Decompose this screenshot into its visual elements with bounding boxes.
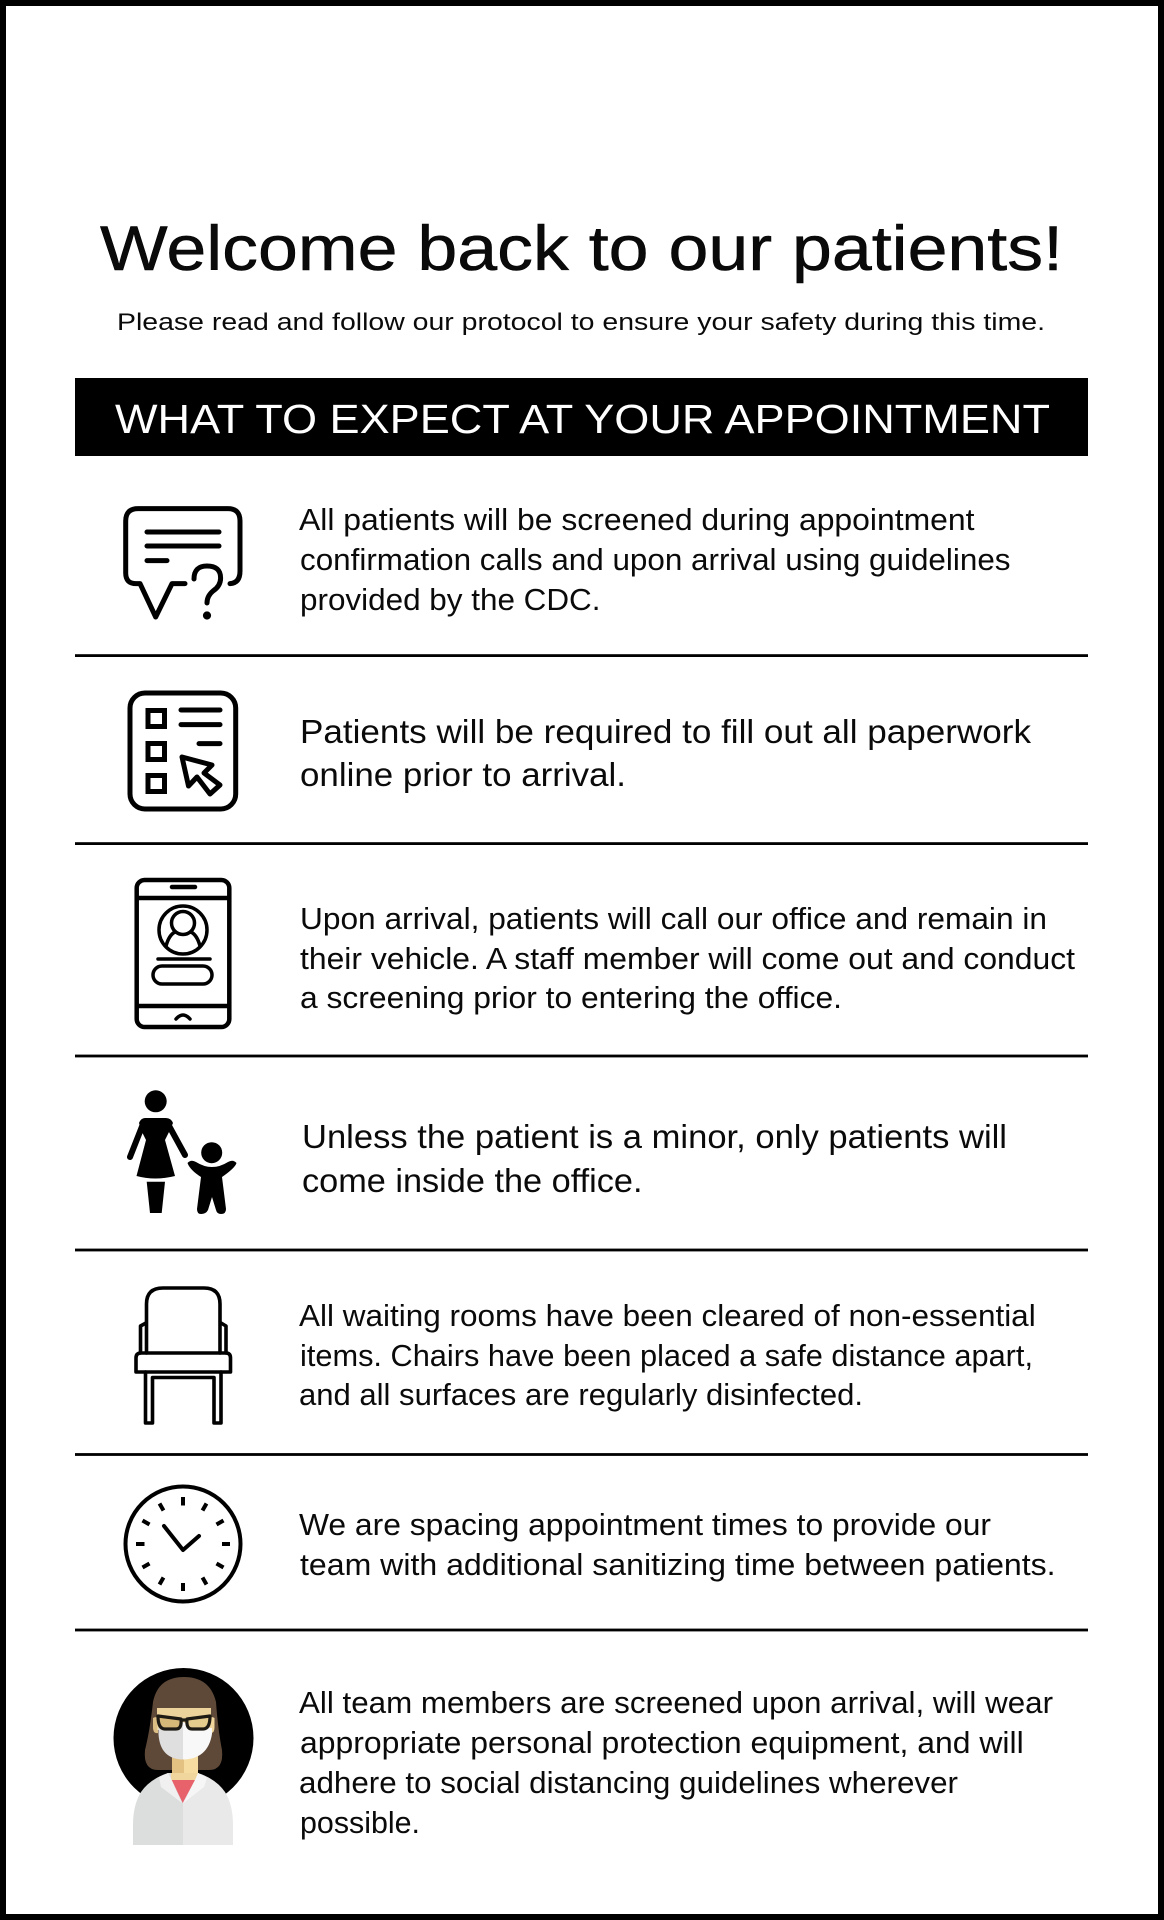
panel: arrival call — [137, 880, 1075, 1027]
text: arrival call: their vehicle. A staff member will come out and conduct — [300, 941, 1075, 976]
panel: spacing appointments — [126, 1486, 1056, 1602]
panel: paperwork — [130, 693, 1031, 809]
text: screening: provided by the CDC. — [300, 582, 600, 617]
text: screening — [299, 502, 1010, 617]
banner heading — [75, 378, 1088, 456]
text: waiting rooms — [299, 1298, 1036, 1412]
icon: masked team member — [114, 1668, 254, 1845]
panel: waiting rooms — [136, 1288, 1036, 1423]
text: team members: possible. — [300, 1805, 420, 1840]
text: arrival call: Upon arrival, patients will call our office and remain in — [300, 901, 1047, 936]
panel: minors — [130, 1090, 1007, 1214]
text: waiting rooms: and all surfaces are regularly disinfected. — [299, 1377, 863, 1412]
text: waiting rooms: All waiting rooms have been cleared of non-essential — [299, 1298, 1036, 1333]
text: minors: come inside the office. — [302, 1163, 642, 1200]
icon: phone with profile — [137, 880, 229, 1027]
banner heading: WHAT TO EXPECT AT YOUR APPOINTMENT — [115, 396, 1050, 442]
text: screening: All patients will be screened during appointment — [299, 502, 975, 537]
icon: online form with cursor — [130, 693, 236, 809]
text: spacing appointments — [299, 1507, 1056, 1582]
text: team members: All team members are screened upon arrival, will wear — [299, 1685, 1053, 1720]
text: team members: adhere to social distancing guidelines wherever — [299, 1765, 958, 1800]
text: team members — [299, 1685, 1053, 1840]
panel: team members — [114, 1668, 1053, 1845]
text: paperwork: Patients will be required to fill out all paperwork — [300, 714, 1031, 751]
title: Welcome back to our patients! — [100, 214, 1063, 284]
text: arrival call — [300, 901, 1075, 1015]
icon: mother and child — [130, 1090, 236, 1214]
text: screening: confirmation calls and upon arrival using guidelines — [300, 542, 1010, 577]
text: paperwork — [300, 714, 1031, 794]
text: minors — [302, 1119, 1007, 1200]
icon: speech bubble with question mark — [126, 509, 240, 619]
text: arrival call: a screening prior to entering the office. — [300, 980, 842, 1015]
panel: screening — [126, 502, 1010, 619]
text: spacing appointments: team with additional sanitizing time between patients. — [300, 1547, 1056, 1582]
text: spacing appointments: We are spacing appointment times to provide our — [299, 1507, 991, 1542]
glasses — [158, 1716, 210, 1729]
subtitle: Please read and follow our protocol to ensure your safety during this time. — [117, 309, 1045, 336]
text: paperwork: online prior to arrival. — [300, 757, 626, 794]
text: team members: appropriate personal protection equipment, and will — [300, 1725, 1024, 1760]
icon: chair — [136, 1288, 230, 1423]
text: minors: Unless the patient is a minor, only patients will — [302, 1119, 1007, 1156]
icon: clock — [126, 1486, 240, 1602]
text: waiting rooms: items. Chairs have been placed a safe distance apart, — [300, 1338, 1033, 1373]
